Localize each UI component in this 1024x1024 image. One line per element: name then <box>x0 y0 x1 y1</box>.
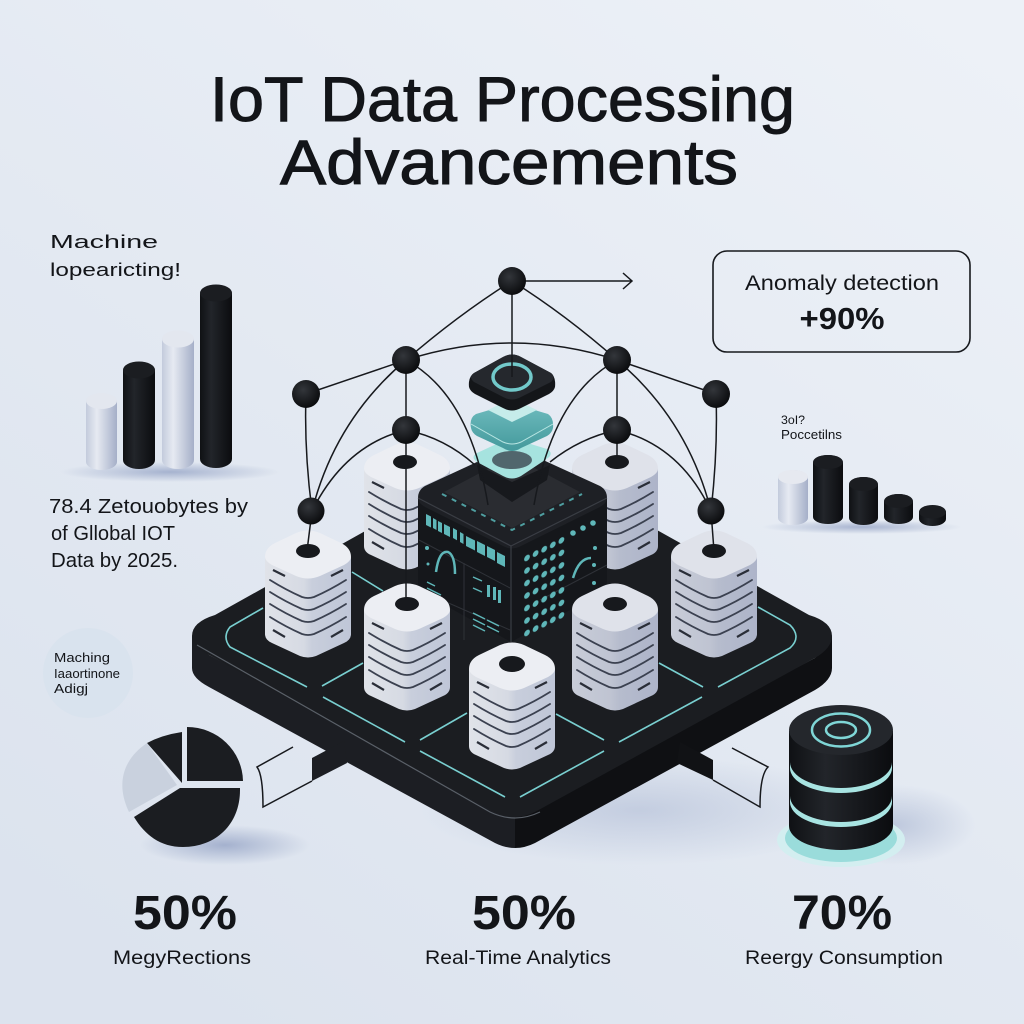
connector bracket: right <box>677 742 768 807</box>
text block: percentile label: 3oI? <box>781 415 805 427</box>
isometric platform <box>192 449 860 865</box>
text block: global IoT data: of Gllobal IOT <box>51 523 175 545</box>
text block: global IoT data: Data by 2025. <box>51 550 178 572</box>
callout: machine circle: Adigj <box>54 682 88 696</box>
stacked chip layers <box>469 354 555 502</box>
database cylinder <box>777 705 975 867</box>
cube status bars <box>425 514 597 632</box>
arrow <box>512 273 632 289</box>
stat: megy rections <box>113 887 251 969</box>
title <box>210 65 795 198</box>
stat: megy rections: MegyRections <box>113 948 251 969</box>
stat: real-time analytics: 50% <box>472 887 576 940</box>
stat: real-time analytics: Real-Time Analytics <box>425 948 611 969</box>
stat: energy consumption: 70% <box>792 887 892 940</box>
stat: energy consumption <box>745 887 943 969</box>
text block: global IoT data <box>49 496 248 572</box>
server: front left <box>364 584 450 710</box>
callout: machine circle <box>43 628 133 718</box>
text block: machine label: Machine <box>50 232 158 252</box>
stat: megy rections: 50% <box>133 887 237 940</box>
callout: anomaly detection <box>713 251 970 352</box>
server: right <box>671 530 757 658</box>
server: front centre <box>469 642 555 770</box>
bar chart: left cylinders <box>60 284 280 482</box>
connector bracket: left <box>257 741 347 807</box>
callout: machine circle: Maching <box>54 651 110 665</box>
stat: energy consumption: Reergy Consumption <box>745 948 943 969</box>
central processing cube <box>418 448 607 642</box>
callout: machine circle: Iaaortinone <box>54 667 120 681</box>
server: front right <box>572 584 658 710</box>
stat: real-time analytics <box>425 887 611 969</box>
title: Advancements <box>280 128 738 198</box>
text block: percentile label <box>781 415 842 442</box>
text block: percentile label: Poccetilns <box>781 428 842 442</box>
bar chart: right cylinders <box>762 455 962 534</box>
callout: anomaly detection: Anomaly detection <box>745 272 939 295</box>
network of nodes <box>292 267 730 672</box>
server: back right <box>572 442 658 570</box>
callout: anomaly detection: +90% <box>800 301 884 336</box>
pie chart <box>122 727 310 865</box>
server: back left <box>364 442 450 570</box>
text block: global IoT data: 78.4 Zetouobytes by <box>49 496 248 518</box>
title: IoT Data Processing <box>210 65 795 135</box>
text block: machine label <box>50 232 181 280</box>
server: left <box>265 530 351 658</box>
text block: machine label: lopearicting! <box>50 260 181 280</box>
cube dot grid <box>522 530 566 642</box>
